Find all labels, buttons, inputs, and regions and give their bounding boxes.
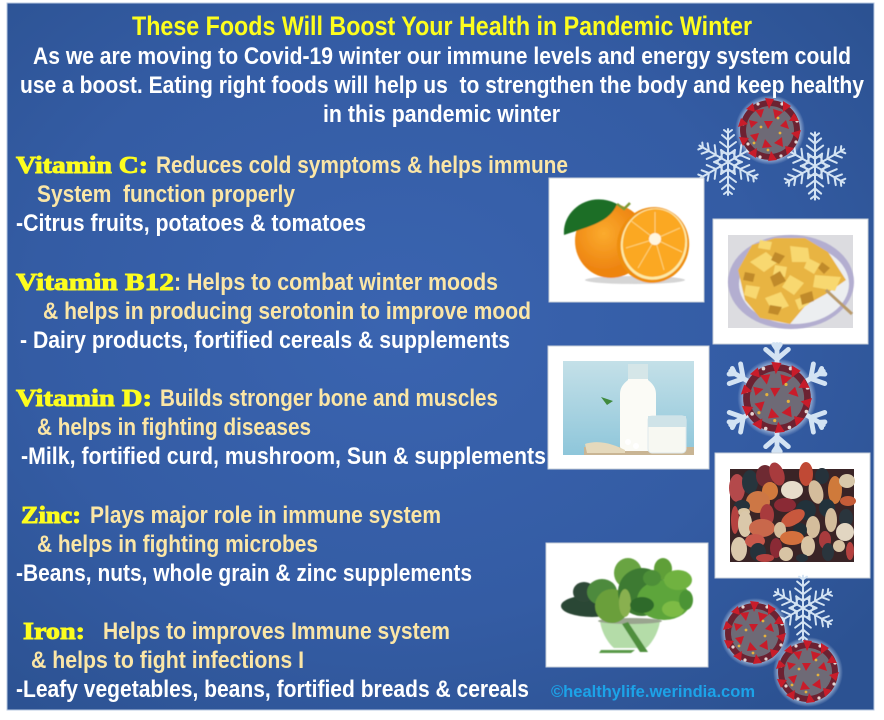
photo card: milk (548, 346, 709, 469)
text block: vitamin C: Reduces cold symptoms & helps immune (156, 152, 568, 179)
text block: iron: Helps to improves Immune system (103, 618, 450, 645)
text block: zinc (16, 502, 472, 587)
text block: vitamin B12: Vitamin B12 (16, 270, 174, 296)
text block: vitamin D (16, 385, 546, 470)
text block: vitamin B12 (16, 269, 531, 354)
icon: middle snowflake and virus (725, 345, 829, 451)
photo card: cereal (713, 219, 868, 344)
text block: zinc: & helps in fighting microbes (37, 531, 318, 558)
text block: vitamin D: Builds stronger bone and muscles (160, 385, 498, 412)
text block: iron: Iron: (23, 619, 85, 645)
text block: iron: & helps to fight infections I (31, 647, 304, 674)
text block: vitamin B12: - Dairy products, fortified cereals & supplements (20, 327, 510, 354)
icon: bottom snowflake and viruses (720, 576, 843, 707)
text block: vitamin C: System function properly (37, 181, 296, 208)
photo card: beans (715, 453, 870, 578)
text block: vitamin D: -Milk, fortified curd, mushroom, Sun & supplements (21, 443, 546, 470)
text block: vitamin C (16, 152, 568, 237)
copyright credit: ©healthylife.werindia.com (551, 682, 755, 701)
intro paragraph: in this pandemic winter (323, 101, 560, 128)
intro paragraph (20, 43, 865, 128)
text block: vitamin D: & helps in fighting diseases (37, 414, 311, 441)
photo card: leafy greens (546, 543, 708, 667)
text block: vitamin B12: & helps in producing serotonin to improve mood (43, 298, 531, 325)
text block: zinc: Plays major role in immune system (90, 502, 441, 529)
text block: vitamin C: -Citrus fruits, potatoes & tomatoes (16, 210, 366, 237)
photo card: orange (549, 178, 704, 302)
text block: zinc: Zinc: (21, 503, 81, 529)
text block: zinc: -Beans, nuts, whole grain & zinc supplements (16, 560, 472, 587)
title: These Foods Will Boost Your Health in Pandemic Winter (132, 11, 752, 41)
text block: iron (16, 618, 529, 703)
text block: vitamin C: Vitamin C: (16, 153, 148, 179)
text block: vitamin B12: : Helps to combat winter moods (174, 269, 498, 296)
icon: top snowflakes and virus (695, 95, 848, 200)
text block: vitamin D: Vitamin D: (16, 386, 152, 412)
text block: iron: -Leafy vegetables, beans, fortified breads & cereals (16, 676, 529, 703)
